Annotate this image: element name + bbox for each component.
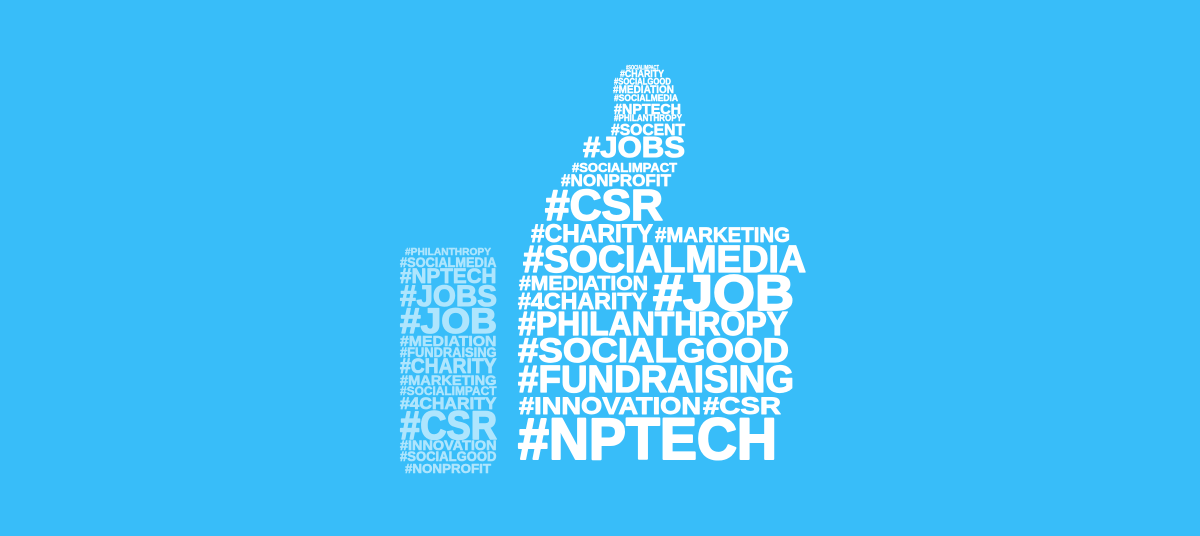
hashtag: nonprofit: #NONPROFIT — [405, 461, 491, 476]
hashtag: job: #JOB — [653, 265, 794, 321]
hashtag: nonprofit: #NONPROFIT — [561, 171, 672, 190]
hashtag: mediation: #MEDIATION — [400, 333, 496, 350]
hashtag: philanthropy: #PHILANTHROPY — [518, 305, 788, 342]
hashtag: fundraising: #FUNDRAISING — [400, 344, 497, 360]
hashtag: charity: #CHARITY — [400, 355, 496, 378]
hashtag: innovation: #INNOVATION — [519, 393, 701, 420]
hashtag: socialimpact: #SOCIALIMPACT — [572, 160, 677, 175]
hashtag: socialimpact tiny: #SOCIALIMPACT — [626, 66, 659, 72]
hashtag: socialgood: #SOCIALGOOD — [614, 76, 671, 86]
hashtag: mediation: #MEDIATION — [613, 84, 674, 96]
hashtag: socialmedia: #SOCIALMEDIA — [400, 254, 496, 270]
hashtag: socialgood: #SOCIALGOOD — [400, 448, 496, 464]
hashtag: 4charity: #4CHARITY — [518, 288, 647, 314]
hashtag: charity: #CHARITY — [531, 220, 653, 248]
hashtag: philanthropy: #PHILANTHROPY — [614, 113, 682, 123]
hashtag: marketing: #MARKETING — [400, 372, 497, 388]
hashtag: socialmedia: #SOCIALMEDIA — [523, 239, 806, 281]
hashtag: mediation: #MEDIATION — [519, 273, 648, 295]
hashtag: jobs: #JOBS — [400, 280, 497, 313]
hashtag: socialmedia: #SOCIALMEDIA — [614, 93, 678, 103]
hashtag: 4charity: #4CHARITY — [400, 394, 497, 413]
thumb tip hashtags — [611, 66, 685, 139]
hashtag: charity: #CHARITY — [620, 69, 664, 80]
panel: cuff column of pale blue hashtags — [400, 247, 497, 476]
hashtag: philanthropy: #PHILANTHROPY — [405, 247, 491, 258]
hashtag: csr: #CSR — [400, 404, 497, 448]
hashtag: socent: #SOCENT — [611, 122, 685, 139]
thumb base hashtags — [545, 132, 685, 230]
hashtag: innovation: #INNOVATION — [400, 437, 496, 453]
hashtag: fundraising: #FUNDRAISING — [518, 359, 794, 401]
hashtag: jobs: #JOBS — [583, 132, 685, 164]
hashtag: socialimpact: #SOCIALIMPACT — [400, 384, 497, 398]
panel: hand and thumb made of white hashtags — [518, 66, 806, 472]
hashtag: nptech large: #NPTECH — [518, 407, 777, 472]
hashtag: marketing: #MARKETING — [655, 224, 790, 247]
hashtag: nptech: #NPTECH — [400, 265, 496, 288]
hashtag: nptech: #NPTECH — [614, 102, 681, 118]
hashtag: socialgood: #SOCIALGOOD — [518, 332, 789, 370]
hashtag: csr large: #CSR — [545, 181, 663, 230]
hashtag: job: #JOB — [400, 302, 497, 341]
hashtag: csr: #CSR — [703, 393, 781, 420]
fist hashtags — [518, 220, 806, 472]
